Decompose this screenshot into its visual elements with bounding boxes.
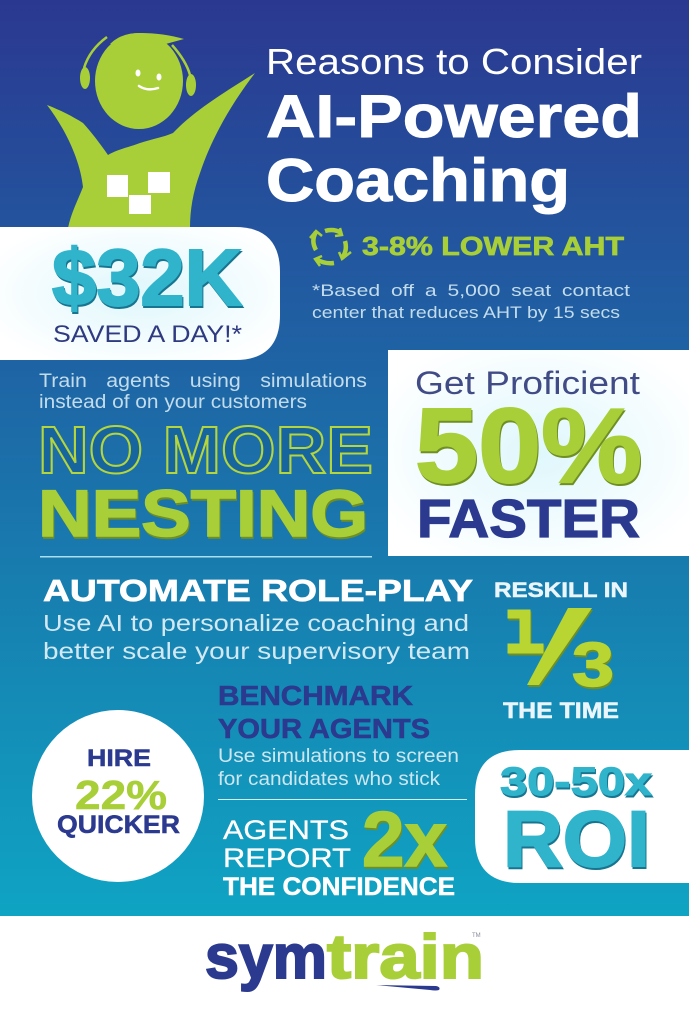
title [266,41,642,214]
text: train agents [39,371,367,413]
heading: benchmark your agents: YOUR AGENTS [218,713,430,744]
divider [218,799,467,800]
heading: benchmark your agents [218,680,430,744]
mascot: green figure with headset [47,33,255,228]
stat: agents report 2x confidence: REPORT [223,843,351,873]
stat: reskill in one third: THE TIME [503,698,619,723]
stat: lower AHT: 3-8% LOWER AHT [362,231,624,261]
stat: agents report 2x confidence [223,795,455,901]
title: Reasons to Consider [266,41,642,82]
heading: no more nesting [38,413,373,550]
heading: benchmark your agents: BENCHMARK [218,680,413,711]
panel: 50 percent faster [388,350,689,556]
panel: ROI: ROI [503,794,650,883]
footnote text: center that reduces AHT by 15 secs [312,303,620,322]
panel: 50 percent faster: FASTER [417,489,640,549]
logo: symtrain: TM [472,933,481,939]
stat: agents report 2x confidence: 2x [362,795,447,883]
stat: reskill in one third: RESKILL IN [494,579,628,602]
text: benchmark description: Use simulations to screen [218,746,459,767]
text: automate description: Use AI to personalize coaching and [43,610,469,636]
panel: hire 22 percent quicker [32,710,204,882]
logo: symtrain: train [327,923,484,992]
title: AI-Powered [266,83,642,150]
text: train agents: Train agents using simulations [39,371,367,392]
stat: agents report 2x confidence: AGENTS [223,815,349,845]
text: automate description [43,610,470,664]
panel: 50 percent faster: Get Proficient [415,365,640,401]
heading: no more nesting: NO MORE [38,413,373,488]
logo: symtrain: sym [205,923,327,992]
icon: circular arrows [310,228,351,266]
panel: ROI: 30-50x [500,760,652,804]
stat: reskill in one third [494,579,628,723]
panel: 32K saved: SAVED A DAY!* [53,321,242,348]
stat: reskill in one third: 3 [572,631,614,700]
panel: 50 percent faster: 50% [415,387,642,505]
footnote text [312,281,630,322]
heading: automate role-play: AUTOMATE ROLE-PLAY [43,573,473,608]
panel: 32K saved [0,227,280,360]
text: benchmark description [218,746,459,790]
panel: hire 22 percent quicker: HIRE [87,745,151,772]
text: train agents: instead of on your customers [39,392,307,413]
text: automate description: better scale your supervisory team [43,638,470,664]
footnote text: *Based off a 5,000 seat contact [312,281,630,300]
panel: hire 22 percent quicker: QUICKER [57,811,180,839]
panel: hire 22 percent quicker: 22% [75,772,167,818]
text: benchmark description: for candidates who stick [218,769,441,790]
panel: ROI [475,750,689,883]
stat: agents report 2x confidence: THE CONFIDENCE [223,873,455,901]
logo: symtrain [205,923,484,992]
title: Coaching [266,147,570,214]
heading: no more nesting: NESTING [38,476,368,550]
footer panel [0,916,689,1024]
panel: 32K saved: $32K [52,233,242,322]
divider [40,556,372,558]
